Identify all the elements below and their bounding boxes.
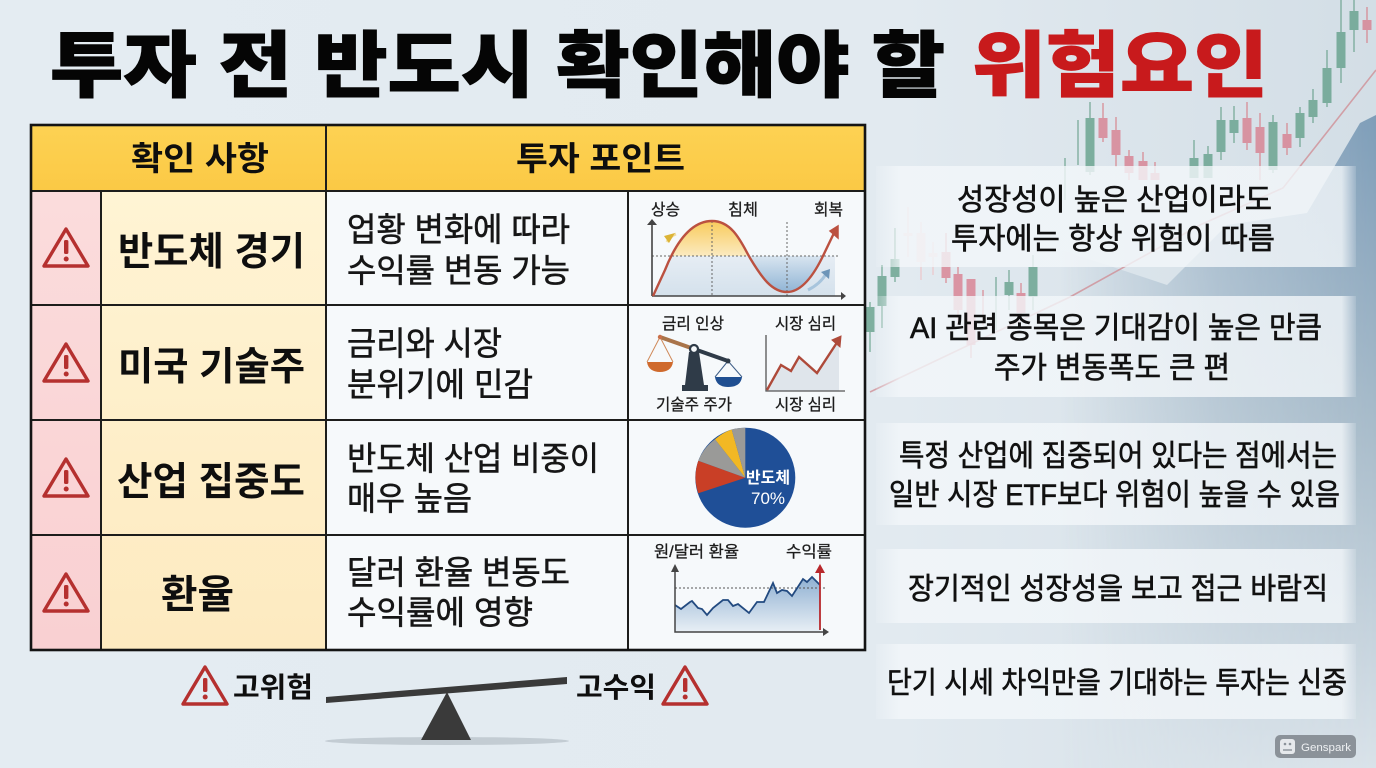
row: 반도체 경기: 반도체 경기 bbox=[118, 231, 305, 274]
note 4: 장기적인 성장성을 보고 접근 바람직 bbox=[908, 573, 1328, 606]
table: risk checklist bbox=[31, 125, 865, 650]
row: 환율 bbox=[44, 543, 832, 636]
chart: balance scale bbox=[647, 315, 742, 414]
note 2 bbox=[876, 296, 1356, 397]
chart: business cycle curve: 회복 bbox=[814, 201, 843, 219]
row: 산업 집중도: 반도체 산업 비중이 bbox=[347, 440, 599, 477]
table header: 확인 사항 bbox=[131, 140, 269, 177]
badge: Genspark: Genspark bbox=[1301, 742, 1352, 754]
table header bbox=[31, 125, 865, 191]
chart: business cycle curve bbox=[647, 201, 846, 300]
chart: exchange rate and returns bbox=[654, 543, 832, 636]
note 1 bbox=[876, 166, 1356, 267]
row: 미국 기술주: 미국 기술주 bbox=[118, 346, 305, 389]
note 3: 일반 시장 ETF보다 위험이 높을 수 있음 bbox=[889, 479, 1340, 512]
icon: warning triangle bbox=[44, 229, 88, 266]
chart: pie 70 percent: 70% bbox=[751, 489, 785, 508]
row: 반도체 경기 bbox=[44, 201, 846, 300]
icon: warning right bbox=[663, 667, 707, 704]
row: 반도체 경기: 업황 변화에 따라 bbox=[347, 211, 570, 248]
chart: market sentiment bbox=[766, 315, 845, 414]
icon: warning left bbox=[183, 667, 227, 704]
chart: market sentiment: 시장 심리 bbox=[775, 396, 836, 414]
chart: exchange rate and returns: 수익률 bbox=[786, 543, 832, 561]
chart: business cycle curve: 침체 bbox=[728, 201, 758, 219]
row: 산업 집중도 bbox=[44, 428, 795, 528]
panel: notes on the right bbox=[876, 166, 1356, 719]
chart: pie 70 percent bbox=[695, 428, 795, 528]
table header: 투자 포인트 bbox=[516, 140, 685, 177]
icon: warning triangle bbox=[44, 459, 88, 496]
note 3: 특정 산업에 집중되어 있다는 점에서는 bbox=[899, 440, 1337, 473]
row: 산업 집중도: 산업 집중도 bbox=[117, 461, 305, 504]
note 3 bbox=[876, 423, 1356, 525]
badge: Genspark bbox=[1275, 735, 1356, 758]
title: 투자 전 반도시 확인해야 할 bbox=[50, 27, 945, 107]
chart: balance scale: 금리 인상 bbox=[662, 315, 724, 333]
note 2: 주가 변동폭도 큰 편 bbox=[994, 352, 1230, 385]
icon: warning triangle bbox=[44, 574, 88, 611]
row: 미국 기술주: 금리와 시장 bbox=[347, 325, 502, 362]
row: 산업 집중도: 매우 높음 bbox=[347, 480, 472, 517]
row: 미국 기술주 bbox=[44, 315, 845, 414]
note 4 bbox=[876, 549, 1356, 623]
note 5 bbox=[876, 644, 1356, 719]
row: 반도체 경기: 수익률 변동 가능 bbox=[347, 252, 570, 289]
note 1: 투자에는 항상 위험이 따름 bbox=[951, 223, 1275, 256]
seesaw: high risk high return: 고수익 bbox=[576, 672, 656, 703]
background with faded stock chart bbox=[866, 0, 1376, 768]
title: 위험요인 bbox=[972, 27, 1268, 107]
seesaw: high risk high return: 고위험 bbox=[233, 672, 313, 703]
title bbox=[50, 27, 1268, 107]
seesaw: high risk high return bbox=[183, 667, 707, 745]
icon: warning triangle bbox=[44, 344, 88, 381]
chart: business cycle curve: 상승 bbox=[651, 201, 680, 219]
chart: pie 70 percent: 반도체 bbox=[746, 469, 790, 487]
chart: exchange rate and returns: 원/달러 환율 bbox=[654, 543, 739, 561]
note 2: AI 관련 종목은 기대감이 높은 만큼 bbox=[910, 312, 1322, 345]
note 1: 성장성이 높은 산업이라도 bbox=[957, 184, 1272, 217]
row: 환율: 수익률에 영향 bbox=[347, 594, 533, 631]
chart: market sentiment: 시장 심리 bbox=[775, 315, 836, 333]
row: 미국 기술주: 분위기에 민감 bbox=[347, 366, 533, 403]
row: 환율: 달러 환율 변동도 bbox=[347, 554, 570, 591]
row: 환율: 환율 bbox=[161, 574, 234, 617]
chart: balance scale: 기술주 주가 bbox=[656, 396, 732, 414]
